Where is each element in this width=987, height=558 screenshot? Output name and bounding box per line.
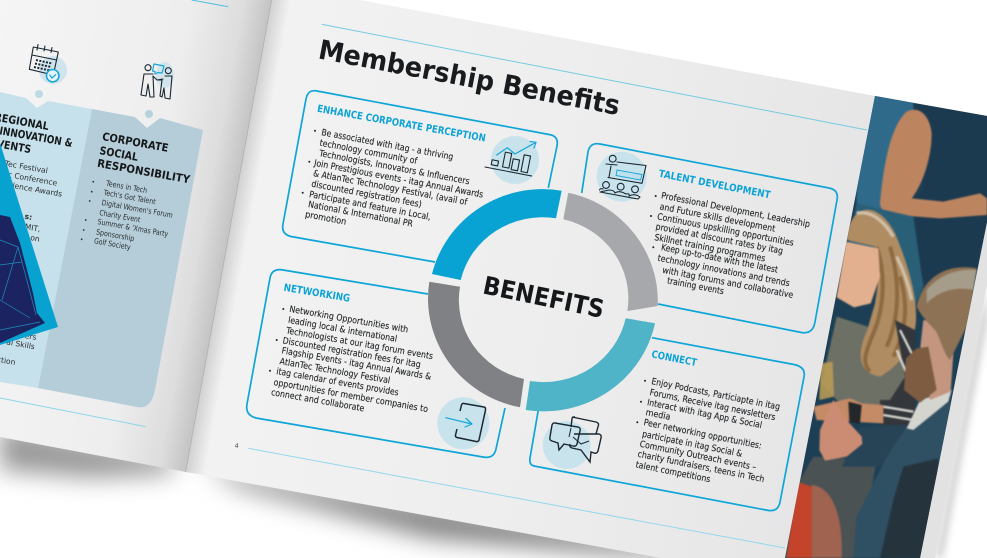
text: regional list: al Skills <box>6 337 36 351</box>
icon: people talking <box>141 62 174 99</box>
panel: enhance corporate perception <box>283 91 557 262</box>
heading: corporate social responsibility: SOCIAL <box>98 144 139 164</box>
panel: talent development <box>582 144 837 333</box>
segment: networking <box>428 282 524 407</box>
list: responsibility activities <box>82 179 174 252</box>
segment: enhance corporate perception <box>432 189 562 280</box>
bullet list <box>635 377 781 485</box>
icon: enter arrow <box>437 397 489 449</box>
page shadows <box>0 285 987 558</box>
text: regional list: s: <box>24 212 33 222</box>
heading: ENHANCE CORPORATE PERCEPTION <box>316 104 486 145</box>
bullet list: leading local & international <box>287 316 398 345</box>
cover artwork <box>0 215 45 343</box>
list: responsibility activities: Golf Society <box>93 236 132 252</box>
bullet list: Be associated with itag - a thriving <box>320 128 454 163</box>
heading: TALENT DEVELOPMENT <box>658 169 771 201</box>
bullet list: Keep up-to-date with the latest <box>660 243 779 276</box>
icon: speech bubbles <box>543 417 601 469</box>
icon: presenter and audience <box>597 152 647 202</box>
bullet list: Technologists, Innovators & Influencers <box>317 149 471 187</box>
text: regional list: ers <box>24 331 37 342</box>
bullet list: Professional Development, Leadership <box>660 191 811 230</box>
heading: CONNECT <box>650 349 698 369</box>
bullet list: Participate and feature in Local, <box>308 190 432 223</box>
dot marker <box>35 90 43 98</box>
bullet list: Forums, Receive itag newsletters <box>649 388 776 423</box>
bullet list: itag calendar of events provides <box>275 367 400 399</box>
bullet list: Continuous upskilling opportunities <box>656 212 795 249</box>
bullet list: Community Outreach events – <box>639 440 757 473</box>
icon: calendar <box>29 44 67 84</box>
ring centre label: BENEFITS <box>480 271 607 324</box>
dot marker <box>145 110 153 118</box>
text: regional list: MIT, <box>24 222 41 234</box>
bullet list: discounted registration fees) <box>310 180 422 210</box>
bullet list <box>270 305 434 415</box>
bullet list: AtlanTec Technology Festival <box>279 357 391 386</box>
bullet list: Skillnet training programmes <box>653 233 766 265</box>
title: Membership Benefits <box>316 35 622 122</box>
list: responsibility activities: Summer & 'Xmas Party <box>97 217 169 239</box>
text: regional list: Tec Conference <box>0 169 58 188</box>
list: responsibility activities: Sponsorship <box>95 227 135 243</box>
list: responsibility activities: Charity Event <box>99 208 141 224</box>
bullet list: opportunities for member companies to <box>273 378 429 415</box>
bullet list: Networking Opportunities with <box>288 305 409 336</box>
bullet list: with itag forums and collaborative <box>661 266 794 301</box>
page number: 4 <box>234 442 239 450</box>
bullet list: Peer networking opportunities: <box>643 418 762 452</box>
left page <box>0 0 272 472</box>
bullet list: Technologists at our itag forum events <box>284 326 434 362</box>
heading: corporate social responsibility: CORPORATE <box>101 130 169 155</box>
heading: regional innovation and events: INNOVATION & <box>0 124 74 150</box>
bullet list: National & International PR <box>307 200 414 230</box>
bullet list: connect and collaborate <box>270 388 365 414</box>
spine <box>186 0 272 472</box>
bullet list: Interact with itag App & Social <box>646 398 763 431</box>
bullet list: training events <box>666 276 725 297</box>
segment: talent development <box>563 193 658 311</box>
panel: networking <box>247 270 505 457</box>
icon: rising bar chart <box>485 136 539 184</box>
photo: networking event guests <box>780 90 987 558</box>
right page <box>186 0 875 558</box>
panel: connect <box>530 338 804 511</box>
list: responsibility activities: Tech's Got Talent <box>102 188 156 206</box>
heading: regional innovation and events <box>0 111 74 156</box>
bullet list: promotion <box>304 210 347 228</box>
text: regional list: on <box>30 233 41 244</box>
heading: corporate social responsibility: RESPONSIBILITY <box>96 157 192 186</box>
list: responsibility activities: Digital Women's Forum <box>101 198 174 220</box>
bullet list: & AtlanTec Technology Festival, (avail of <box>312 169 469 208</box>
left page top rule <box>192 0 228 7</box>
bullet list: talent competitions <box>635 460 711 485</box>
bullet list: and Future skills development <box>659 202 776 235</box>
list: responsibility activities: Teens in Tech <box>105 179 148 195</box>
bullet list: media <box>645 408 671 423</box>
bullet list: participate in itag Social & <box>641 430 743 460</box>
bullet list: technology community of <box>319 139 419 167</box>
bullet list <box>303 128 484 230</box>
left page bottom rule <box>0 398 146 427</box>
page edge stack <box>920 222 987 558</box>
bullet list: charity fundraisers, teens in Tech <box>637 450 765 485</box>
bottom rule <box>248 448 785 548</box>
panel: regional innovation and events <box>0 92 92 388</box>
bullet list: Flagship Events - itag Annual Awards & <box>281 346 432 383</box>
heading: corporate social responsibility <box>96 130 192 186</box>
ring chart: benefits <box>428 189 658 411</box>
text: regional list: nTec Festival <box>0 158 49 175</box>
panel: corporate social responsibility <box>38 109 203 407</box>
bullet list <box>651 191 811 301</box>
bullet list: Join Prestigious events - itag Annual Awards <box>312 159 484 201</box>
text: regional list <box>0 158 63 367</box>
text: regional list: ellence Awards <box>5 180 63 199</box>
segment: connect <box>526 318 655 411</box>
top rule <box>322 24 867 130</box>
heading: NETWORKING <box>283 283 351 305</box>
bullet list: Enjoy Podcasts, Particiapte in itag <box>650 377 781 413</box>
bullet list: provided at discount rates by itag <box>655 222 784 257</box>
overlapping brochure cover <box>0 143 58 345</box>
bullet list: technology innovations and trends <box>657 254 791 289</box>
bullet list: Discounted registration fees for itag <box>282 336 421 371</box>
